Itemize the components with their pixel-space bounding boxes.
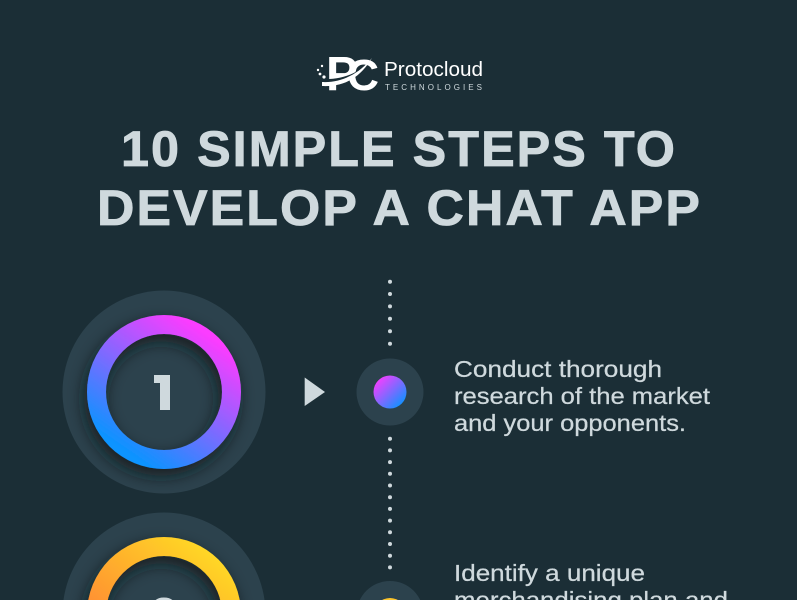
title: 10 SIMPLE STEPS TO	[121, 121, 677, 177]
step 1 gradient ring	[87, 315, 241, 469]
title	[97, 121, 702, 236]
logo wordmark: Protocloud	[384, 59, 483, 81]
logo mark: PC monogram	[317, 48, 379, 101]
step 1 number: 1	[152, 368, 178, 421]
step 1 timeline node	[356, 358, 424, 426]
step 2 description	[454, 560, 728, 600]
logo mark: PC monogram: C	[347, 51, 379, 100]
step 1 number	[154, 375, 170, 410]
step 2 timeline node	[356, 581, 424, 600]
step 1 badge	[62, 290, 266, 494]
arrow: step 1	[305, 378, 325, 406]
step 2 gradient ring	[87, 537, 241, 600]
logo mark: PC monogram: P	[326, 48, 358, 101]
step 1 description: Conduct thorough	[454, 356, 662, 382]
dotted timeline: top segment	[388, 280, 392, 346]
logo: Protocloud Technologies	[317, 48, 483, 101]
step 1 description: research of the market	[454, 383, 711, 409]
dotted timeline: middle segment	[388, 437, 392, 569]
step 1 node dot	[374, 376, 406, 408]
logo tagline: TECHNOLOGIES	[385, 83, 482, 92]
step 1 description	[454, 356, 711, 436]
step 2 badge	[62, 512, 266, 600]
step 1 description: and your opponents.	[454, 410, 686, 436]
step 2 node dot	[374, 598, 406, 600]
title: DEVELOP A CHAT APP	[97, 180, 702, 236]
step 2 description: Identify a unique	[454, 560, 645, 586]
